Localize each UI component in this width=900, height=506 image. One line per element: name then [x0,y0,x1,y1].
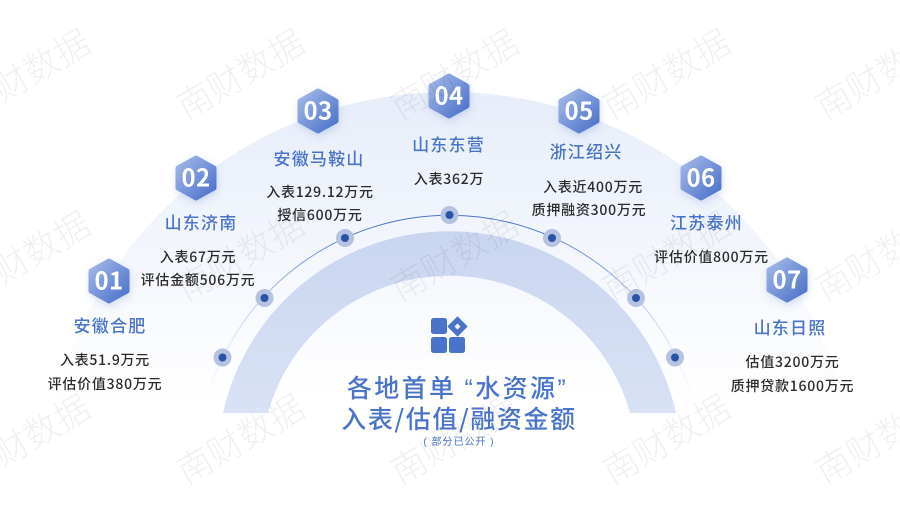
item 04 山东东营: 04 [435,76,463,112]
watermark: 南财数据 [380,380,527,495]
inner thick arc band [223,231,676,413]
item 06 江苏泰州: 06 [687,158,715,194]
item 06 江苏泰州: 江苏泰州 [670,209,743,234]
item 05 浙江绍兴: 质押融资300万元 [532,200,646,220]
item 03 安徽马鞍山: 入表129.12万元 [266,182,374,202]
item 05 浙江绍兴: 入表近400万元 [543,177,643,197]
watermark: 南财数据 [166,380,313,495]
item 02 山东济南: 02 [182,158,210,194]
icon: grid of squares [431,317,467,353]
item 01 安徽合肥: 入表51.9万元 [60,350,150,370]
item 01 安徽合肥: 评估价值380万元 [48,374,162,394]
item 07 山东日照: 质押贷款1600万元 [731,376,854,396]
item 07 山东日照: 估值3200万元 [746,352,839,372]
item 05 浙江绍兴 [532,91,646,220]
item 01 安徽合肥: 01 [95,262,123,296]
item 02 山东济南 [141,158,255,290]
watermark: 南财数据 [592,380,739,495]
large background arc [44,92,854,497]
item 04 山东东营 [412,76,485,189]
watermark: 南财数据 [380,15,527,130]
item 02 山东济南: 入表67万元 [160,247,236,267]
item 04 山东东营: 山东东营 [412,131,485,156]
item 01 安徽合肥: 安徽合肥 [74,312,146,337]
item 02 山东济南: 评估金额506万元 [141,270,255,290]
item 04 山东东营: 入表362万 [414,169,484,189]
title: 各地首单 “水资源” [347,369,568,405]
title: 入表/估值/融资金额 [341,400,577,436]
item 05 浙江绍兴: 浙江绍兴 [550,138,622,163]
watermark: 南财数据 [166,197,313,312]
item 02 山东济南: 山东济南 [165,209,237,234]
watermark: 南财数据 [166,15,313,130]
inner white area [268,276,630,413]
timeline arc [209,215,690,392]
item 07 山东日照: 07 [773,260,801,296]
item 06 江苏泰州 [654,158,769,267]
item 07 山东日照 [731,260,854,396]
item 03 安徽马鞍山: 安徽马鞍山 [274,145,364,170]
watermark: 南财数据 [592,197,739,312]
item 03 安徽马鞍山 [266,91,374,225]
item 03 安徽马鞍山: 授信600万元 [277,205,363,225]
item 01 安徽合肥 [48,261,162,394]
watermark: 南财数据 [592,15,739,130]
item 06 江苏泰州: 评估价值800万元 [654,247,769,267]
watermark: 南财数据 [380,197,527,312]
item 05 浙江绍兴: 05 [565,92,593,126]
item 07 山东日照: 山东日照 [754,314,826,339]
timeline dots [214,206,684,366]
item 03 安徽马鞍山: 03 [304,92,332,126]
subtitle note: ( 部分已公开 ) [423,433,495,448]
title [341,369,577,436]
